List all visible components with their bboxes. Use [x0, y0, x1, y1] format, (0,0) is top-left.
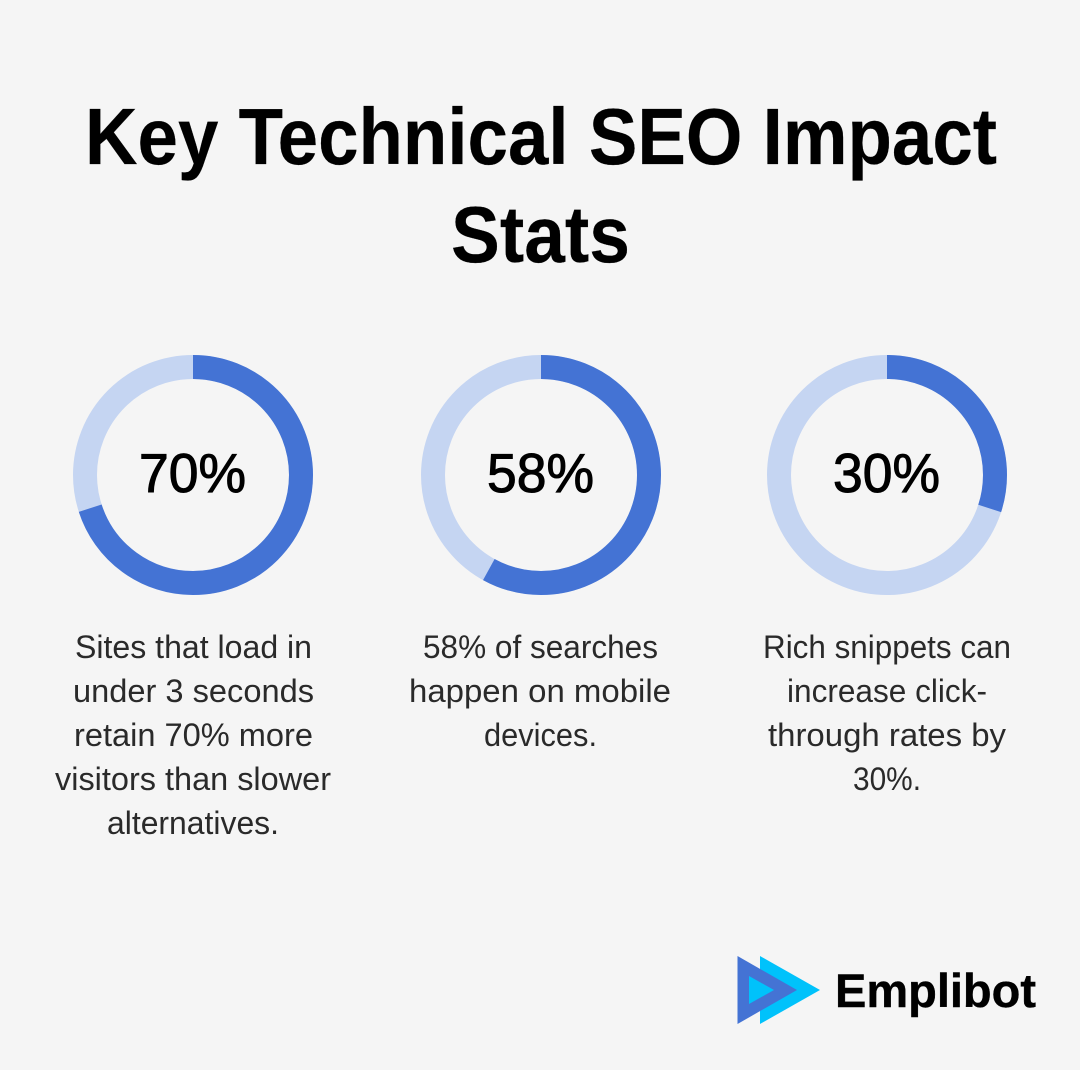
text block: 70% description: Sites that load in — [75, 629, 312, 665]
text block: 70% description: retain 70% more — [74, 717, 313, 753]
text block: 58% description: devices. — [484, 717, 597, 753]
title — [85, 92, 997, 279]
text block: 30% description: increase click- — [787, 673, 987, 709]
title: Key Technical SEO Impact — [85, 92, 997, 181]
title: Stats — [451, 190, 630, 279]
text block: 70% description: under 3 seconds — [73, 673, 314, 709]
icon: play triangles — [738, 956, 820, 1024]
text block: 70% description: visitors than slower — [55, 761, 331, 797]
donut chart: 70% — [85, 367, 301, 583]
text block: 58% description: 58% of searches — [423, 629, 658, 665]
donut chart: 70%: 70% — [139, 442, 246, 504]
text block: 30% description: Rich snippets can — [763, 629, 1011, 665]
donut chart: 58% — [433, 367, 649, 583]
text block: 58% description — [409, 629, 671, 753]
text block: 30% description: through rates by — [768, 717, 1006, 753]
logo: Emplibot — [738, 956, 1036, 1024]
donut chart: 58%: 58% — [487, 442, 594, 504]
panel: 70% stat — [55, 367, 331, 841]
donut chart: 30% — [779, 367, 995, 583]
text block: 30% description: 30%. — [853, 761, 921, 797]
panel: 58% stat — [409, 367, 671, 753]
text block: 30% description — [763, 629, 1011, 797]
donut chart: 30%: 30% — [833, 442, 940, 504]
text block: 58% description: happen on mobile — [409, 673, 671, 709]
panel: 30% stat — [763, 367, 1011, 797]
text block: 70% description: alternatives. — [107, 805, 279, 841]
text block: 70% description — [55, 629, 331, 841]
logo: Emplibot: Emplibot — [835, 964, 1036, 1017]
